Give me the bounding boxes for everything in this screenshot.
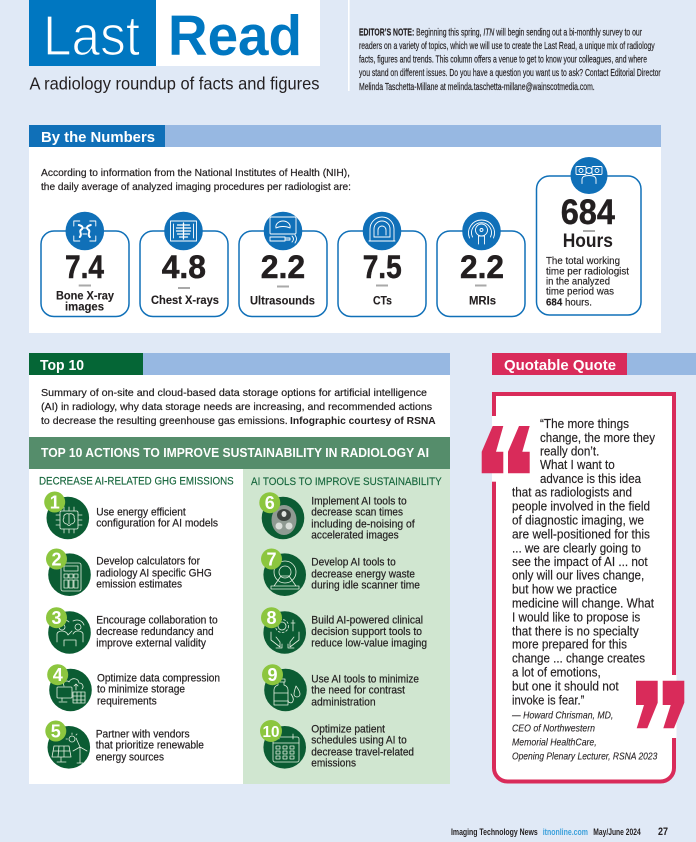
action 5: Partner with vendors xyxy=(96,728,190,740)
action 6: Implement AI tools to xyxy=(311,496,407,508)
action 5: energy sources xyxy=(96,752,165,764)
panel: top 10 summary: (AI) in radiology, why data storage needs are increasing, and recommended actions xyxy=(41,401,432,413)
stat card: 684 hours: 684 xyxy=(561,193,615,232)
stat card: 684 hours: 684 hours. xyxy=(546,297,592,309)
quote text: of diagnostic imaging, we xyxy=(512,514,644,528)
stat card: bone x-ray images: 7.4 xyxy=(65,249,104,285)
quote text: What I want to xyxy=(540,458,615,472)
panel: decrease AI-related GHG emissions xyxy=(29,469,243,784)
action 6: including de-noising of xyxy=(311,519,416,531)
stat card: cts: CTs xyxy=(373,294,392,308)
quote text: change ... change creates xyxy=(512,652,645,666)
icon: opening quotation mark xyxy=(482,426,530,473)
logo: Last Read: Last xyxy=(43,4,140,68)
action 8 xyxy=(261,607,427,654)
action 9: Use AI tools to minimize xyxy=(311,674,419,686)
panel: AI tools to improve sustainability xyxy=(243,469,450,784)
action 6: decrease scan times xyxy=(311,507,404,519)
action 2: radiology AI specific GHG xyxy=(96,568,212,580)
banner: top 10 actions: TOP 10 ACTIONS TO IMPROVE SUSTAINABILITY IN RADIOLOGY AI xyxy=(41,446,429,460)
action 4 xyxy=(47,664,220,711)
quote text: only will our lives change, xyxy=(512,569,644,583)
stat card: chest x-rays xyxy=(140,212,228,316)
stat card: 684 hours: time period was xyxy=(546,286,614,298)
intro text: the daily average of analyzed imaging procedures per radiologist are: xyxy=(41,181,351,193)
quote text: change, the more they xyxy=(540,431,656,445)
action 9: administration xyxy=(311,697,376,709)
stat card: ultrasounds: 2.2 xyxy=(261,249,305,285)
action 6: accelerated images xyxy=(311,530,399,542)
action 3: improve external validity xyxy=(96,638,207,650)
logo: Last Read: Read xyxy=(168,4,302,68)
action 1: 1 xyxy=(50,492,60,512)
footer: Imaging Technology News xyxy=(451,827,538,838)
quote text: “The more things xyxy=(540,417,629,431)
stat card: 684 hours: Hours xyxy=(563,231,613,252)
action 10: schedules using AI to xyxy=(311,735,407,747)
action 10 xyxy=(260,720,414,770)
tagline: A radiology roundup of facts and figures xyxy=(30,74,320,94)
action 7: 7 xyxy=(266,550,277,570)
quote text: really don’t. xyxy=(540,444,599,458)
icon: brain scan xyxy=(272,505,296,535)
column heading: left: DECREASE AI-RELATED GHG EMISSIONS xyxy=(39,476,234,488)
editor's note xyxy=(348,0,661,93)
panel: top 10 summary xyxy=(29,375,450,437)
footer xyxy=(451,826,668,838)
quote text xyxy=(512,417,656,707)
action 4: requirements xyxy=(97,696,157,708)
action 4: to minimize storage xyxy=(97,684,185,696)
action 3: 3 xyxy=(51,608,62,628)
action 9: the need for contrast xyxy=(311,685,405,697)
stat card: ultrasounds: Ultrasounds xyxy=(250,294,315,308)
action 3: decrease redundancy and xyxy=(96,626,214,638)
action 9 xyxy=(262,664,419,711)
section header: Top 10: Top 10 xyxy=(40,357,84,374)
action 5: that prioritize renewable xyxy=(96,740,204,752)
stat card: mris xyxy=(437,212,525,316)
stat card: bone x-ray images: Bone X-ray xyxy=(56,288,114,302)
section header: Quotable Quote: Quotable Quote xyxy=(504,357,616,374)
quote attribution: Opening Plenary Lecturer, RSNA 2023 xyxy=(512,752,657,763)
action 8: 8 xyxy=(266,608,277,628)
action 2: Develop calculators for xyxy=(96,556,200,568)
quote text: that there is no specialty xyxy=(512,625,639,639)
logo: Last Read xyxy=(29,0,320,68)
action 8: Build AI-powered clinical xyxy=(311,615,423,627)
stat card: mris: 2.2 xyxy=(460,249,504,285)
quote text: I would like to propose is xyxy=(512,611,640,625)
action 3: Encourage collaboration to xyxy=(96,615,218,627)
stat card: cts: 7.5 xyxy=(363,249,402,285)
section header: Top 10 xyxy=(29,353,450,375)
action 2: emission estimates xyxy=(96,579,183,591)
quote attribution: — Howard Chrisman, MD, xyxy=(511,711,613,722)
action 10: decrease travel-related xyxy=(311,747,414,759)
quote text: people involved in the field xyxy=(512,500,650,514)
action 9: 9 xyxy=(267,665,278,685)
stat card: bone x-ray images xyxy=(41,212,129,316)
quote attribution: Memorial HealthCare, xyxy=(512,738,597,749)
stat card: 684 hours: time per radiologist xyxy=(546,266,629,278)
section header: Quotable Quote xyxy=(492,353,696,375)
panel: top 10 summary: Summary of on-site and cloud-based data storage options for artificial intelligence xyxy=(41,387,427,399)
action 2 xyxy=(46,548,212,596)
section header: By the Numbers xyxy=(29,125,661,147)
stat card: bone x-ray images: images xyxy=(65,300,104,314)
quote text: are well-positioned for this xyxy=(512,528,650,542)
action 6: 6 xyxy=(265,493,275,513)
stat card: chest x-rays: 4.8 xyxy=(162,249,206,285)
quote text: invoke is fear.” xyxy=(512,693,584,707)
action 5 xyxy=(45,720,204,769)
action 7: Develop AI tools to xyxy=(311,557,396,569)
action 8: reduce low-value imaging xyxy=(311,638,427,650)
quote text: medicine will change. What xyxy=(512,597,654,611)
stat card: ultrasounds xyxy=(239,212,327,316)
action 7: decrease energy waste xyxy=(311,569,415,581)
icon: closing quotation mark xyxy=(636,681,684,728)
quote text: more prepared for this xyxy=(512,638,627,652)
action 8: decision support tools to xyxy=(311,626,422,638)
panel: quote xyxy=(482,394,684,782)
section header: By the Numbers: By the Numbers xyxy=(41,129,155,146)
quote attribution xyxy=(511,711,657,763)
quote text: see the impact of AI ... not xyxy=(512,555,648,569)
intro text xyxy=(41,167,351,193)
quote text: ... we are clearly going to xyxy=(512,541,641,555)
action 4: Optimize data compression xyxy=(97,673,220,685)
action 4: 4 xyxy=(53,665,63,685)
quote text: advance is this idea xyxy=(540,472,641,486)
stat card: 684 hours: The total working xyxy=(546,255,620,267)
action 6 xyxy=(259,492,416,542)
action 1 xyxy=(44,492,219,539)
action 7: during idle scanner time xyxy=(311,580,420,592)
quote text: but one it should not xyxy=(512,680,619,694)
action 10: 10 xyxy=(262,724,280,741)
action 7 xyxy=(261,548,420,596)
stat card: 684 hours xyxy=(536,157,641,315)
panel: top 10 summary: Infographic courtesy of RSNA xyxy=(290,415,436,427)
quote text: a lot of emotions, xyxy=(512,666,601,680)
intro text: According to information from the National Institutes of Health (NIH), xyxy=(41,167,350,179)
column heading: right: AI TOOLS TO IMPROVE SUSTAINABILITY xyxy=(251,476,442,488)
quote attribution: CEO of Northwestern xyxy=(512,724,595,735)
stat card: chest x-rays: Chest X-rays xyxy=(151,293,219,307)
quote text: but how we practice xyxy=(512,583,617,597)
footer: May/June 2024 xyxy=(593,827,641,838)
action 3 xyxy=(46,607,218,654)
banner: top 10 actions xyxy=(29,437,450,469)
action 10: Optimize patient xyxy=(311,724,385,736)
action 5: 5 xyxy=(51,722,61,742)
quote text: that as radiologists and xyxy=(512,486,632,500)
stat card: cts xyxy=(338,212,426,316)
action 1: Use energy efficient xyxy=(96,507,186,519)
action 2: 2 xyxy=(51,550,62,570)
footer: itnonline.com xyxy=(543,827,588,838)
stat card: mris: MRIs xyxy=(469,294,496,308)
panel: by the numbers xyxy=(29,147,661,333)
action 1: configuration for AI models xyxy=(96,518,219,530)
stat card: 684 hours: in the analyzed xyxy=(546,276,610,288)
panel: top 10 summary: to decrease the resulting greenhouse gas emissions. xyxy=(41,415,288,427)
action 10: emissions xyxy=(311,758,357,770)
footer: 27 xyxy=(658,826,668,838)
